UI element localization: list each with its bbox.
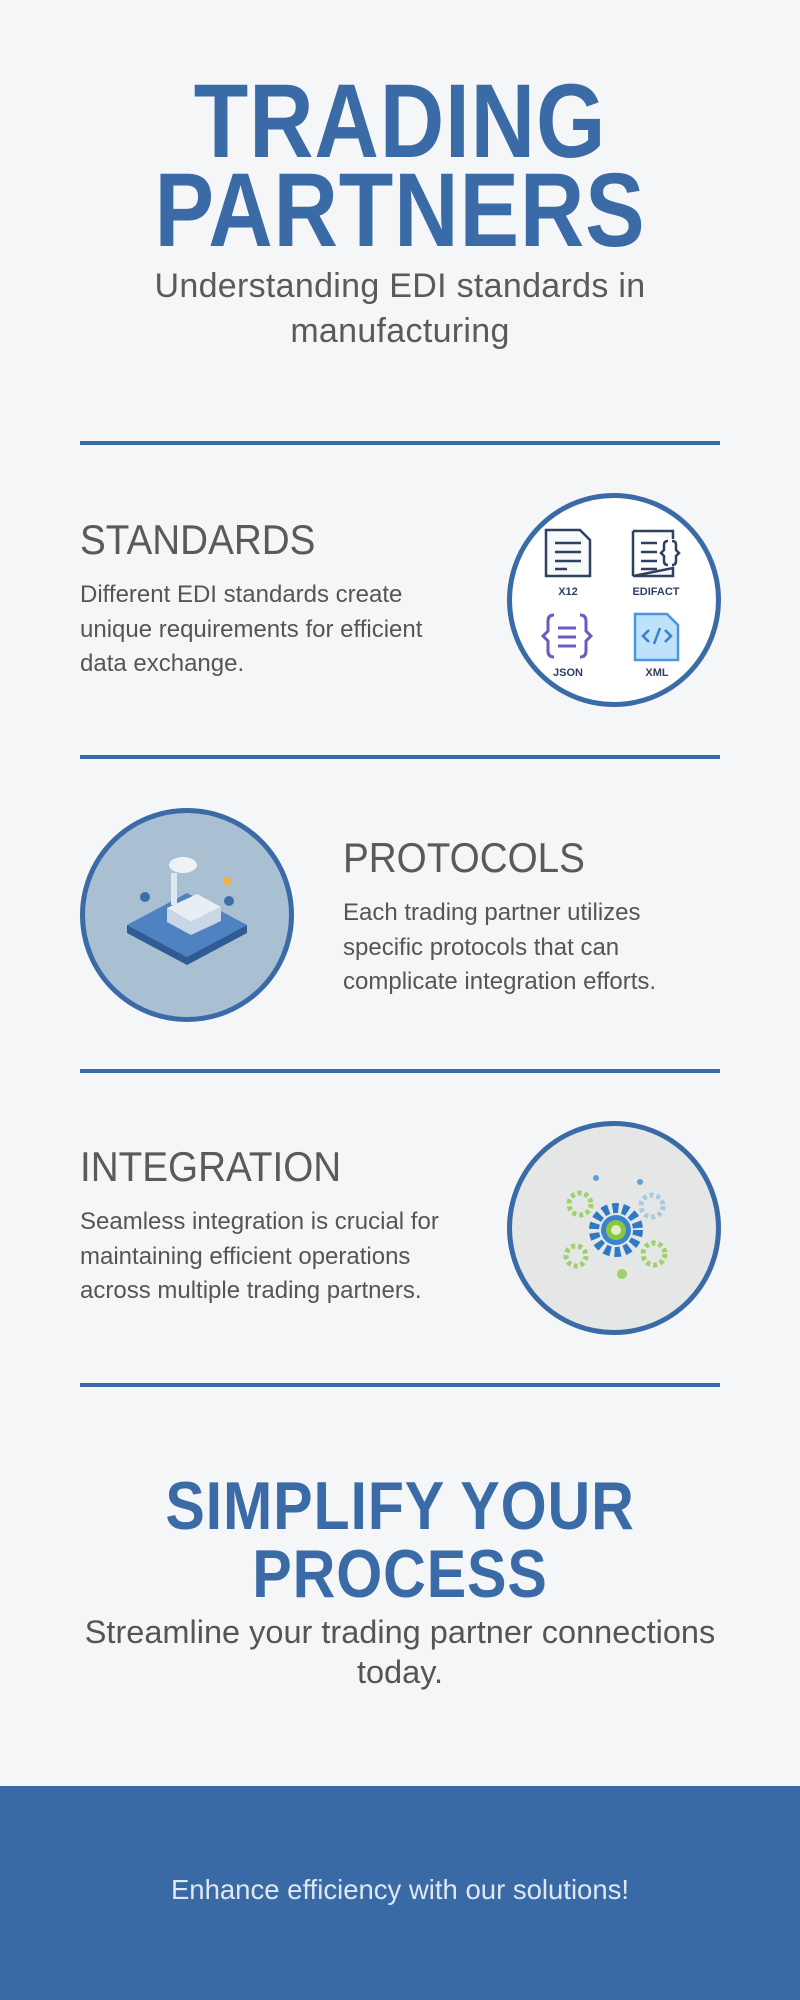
footer text: Enhance efficiency with our solutions! (171, 1874, 629, 1905)
footer (0, 1786, 800, 2000)
icon: standards circle: JSON (553, 667, 583, 679)
panel: standards (80, 493, 721, 707)
subtitle: manufacturing (290, 312, 510, 350)
title: PARTNERS (154, 152, 646, 269)
icon: integration circle (507, 1121, 721, 1335)
text: protocols: Each trading partner utilizes specific protocols that can complicate integration efforts. (343, 899, 656, 995)
title: TRADING (194, 63, 606, 180)
heading: integration: INTEGRATION (80, 1143, 341, 1190)
icon: standards circle: XML (645, 667, 669, 679)
subtitle: simplify: today. (357, 1654, 443, 1690)
icon: standards circle (507, 493, 721, 707)
subtitle: simplify (85, 1614, 715, 1690)
heading: simplify (165, 1468, 635, 1612)
heading: simplify: SIMPLIFY YOUR (165, 1468, 635, 1544)
heading: simplify: PROCESS (252, 1536, 548, 1612)
subtitle: simplify: Streamline your trading partner connections (85, 1614, 715, 1650)
subtitle (155, 267, 645, 350)
icon: standards circle: X12 (558, 586, 578, 598)
text: standards: Different EDI standards create unique requirements for efficient data exchange. (80, 581, 422, 677)
title (154, 63, 646, 269)
text: integration: Seamless integration is crucial for maintaining efficient operations across multiple trading partners. (80, 1208, 439, 1304)
panel: integration (80, 1121, 721, 1335)
subtitle: Understanding EDI standards in (155, 267, 645, 305)
panel: protocols (80, 808, 656, 1022)
icon: protocols circle (80, 808, 294, 1022)
heading: protocols: PROTOCOLS (343, 834, 585, 881)
heading: standards: STANDARDS (80, 516, 315, 563)
icon: standards circle: EDIFACT (632, 586, 680, 598)
